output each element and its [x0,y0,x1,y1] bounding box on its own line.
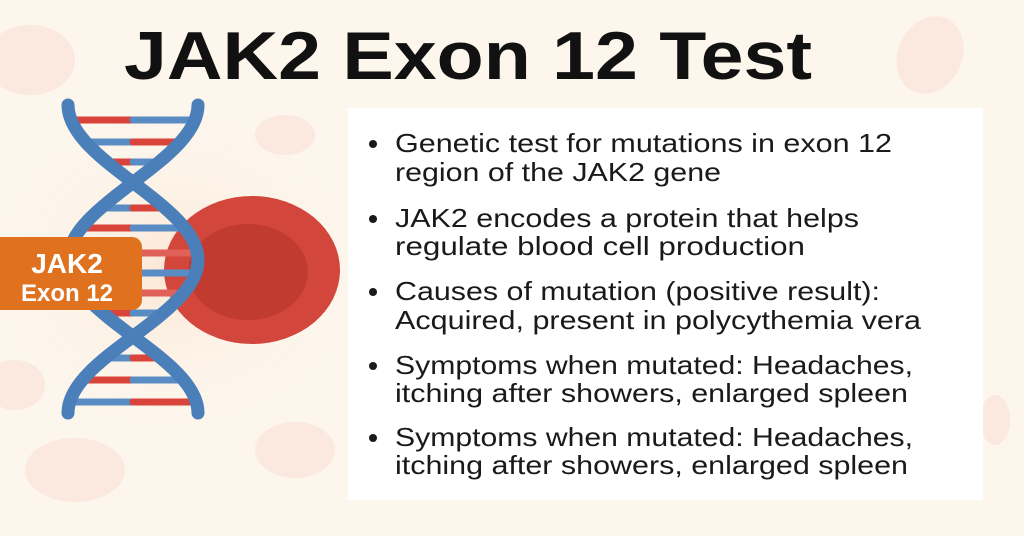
bullet 4 [369,350,913,408]
bullet 5: itching after showers, enlarged spleen [395,450,908,480]
bullet 2: JAK2 encodes a protein that helps [395,203,859,233]
label: JAK2 Exon 12 [0,237,142,310]
bullet 3 [369,276,922,335]
label: JAK2 Exon 12: Exon 12 [21,280,113,307]
title: JAK2 Exon 12 Test [124,18,812,94]
icon: red blood cell [164,196,340,344]
bullet 4: itching after showers, enlarged spleen [395,378,908,408]
bullet 3: Acquired, present in polycythemia vera [395,305,922,335]
bullet 1: region of the JAK2 gene [395,157,721,187]
label: JAK2 Exon 12: JAK2 [31,248,103,279]
bullet 3: Causes of mutation (positive result): [395,276,880,306]
bullet 4: Symptoms when mutated: Headaches, [395,350,913,380]
bullet 5 [369,422,913,480]
panel: facts [348,108,983,500]
bullet 2: regulate blood cell production [395,231,805,261]
bullet 1 [369,128,892,187]
bullet 2 [369,203,859,261]
bullet 5: Symptoms when mutated: Headaches, [395,422,913,452]
icon: DNA double helix [68,105,198,413]
bullet 1: Genetic test for mutations in exon 12 [395,128,892,158]
